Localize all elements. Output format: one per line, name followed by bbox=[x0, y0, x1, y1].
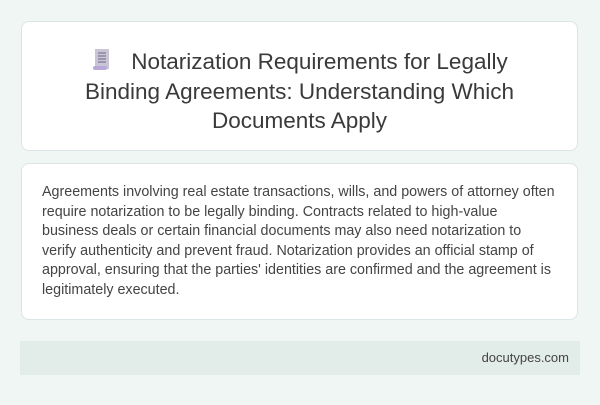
paragraph bbox=[42, 184, 555, 298]
footer text: docutypes.com bbox=[482, 350, 569, 365]
paragraph: require notarization to be legally binding. Contracts related to high-value bbox=[42, 204, 497, 220]
panel: header bbox=[21, 21, 578, 151]
paragraph: approval, ensuring that the parties' identities are confirmed and the agreement is bbox=[42, 262, 551, 278]
paragraph: legitimately executed. bbox=[42, 282, 179, 298]
paragraph: business deals or certain financial documents may also need notarization to bbox=[42, 223, 521, 239]
title: Notarization Requirements for Legally Binding Agreements: Understanding Which Documents Apply bbox=[85, 49, 514, 133]
paragraph: verify authenticity and prevent fraud. Notarization provides an official stamp of bbox=[42, 242, 534, 258]
paragraph: Agreements involving real estate transactions, wills, and powers of attorney often bbox=[42, 184, 555, 200]
icon: document bbox=[93, 49, 109, 70]
panel: body text bbox=[21, 163, 578, 320]
footer bbox=[20, 341, 580, 375]
